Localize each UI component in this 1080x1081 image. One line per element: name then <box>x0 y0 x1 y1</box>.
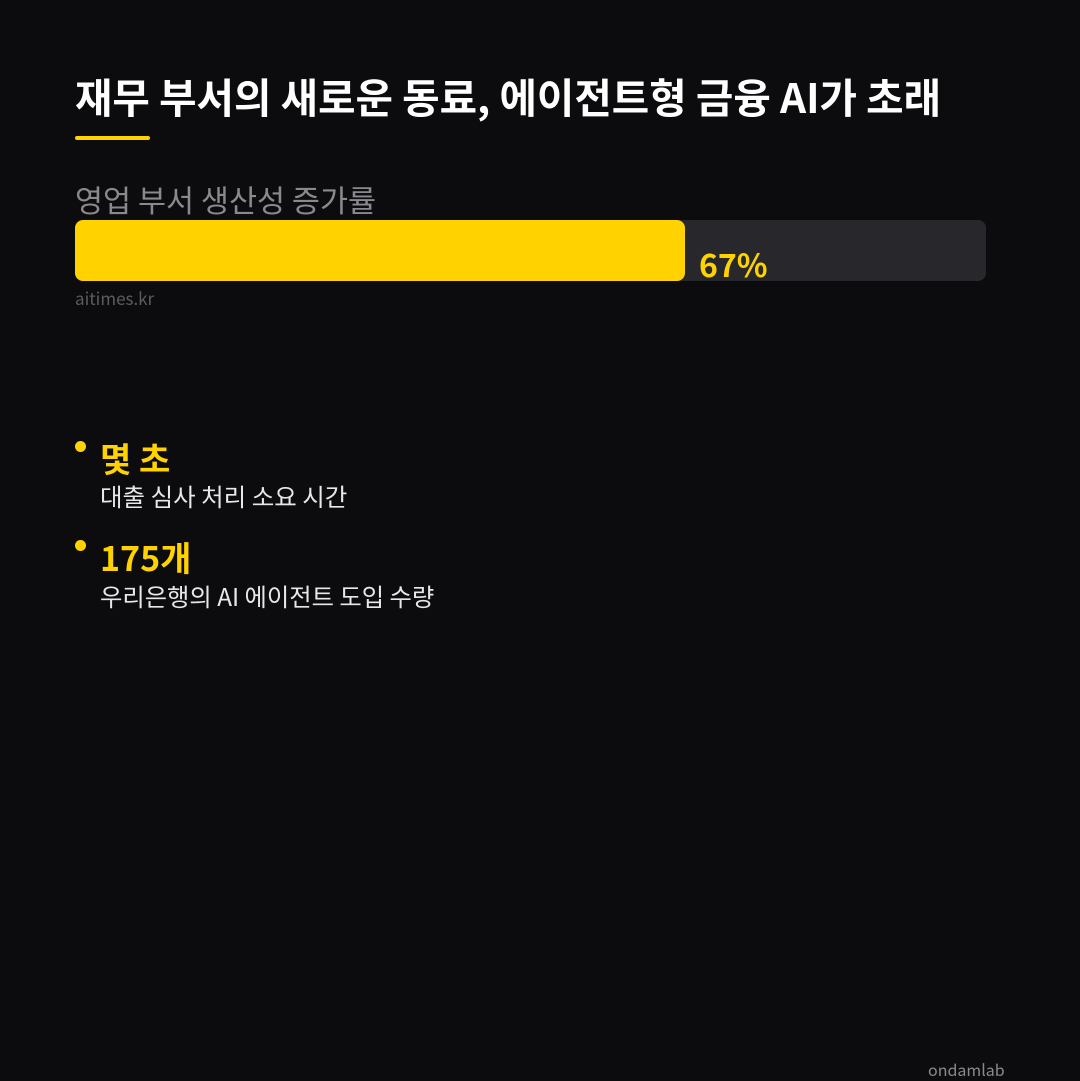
bullet <box>75 540 86 551</box>
bar label: 영업 부서 생산성 증가률 <box>75 177 376 221</box>
footer brand: ondamlab <box>928 1057 1005 1081</box>
stat value: 175개 <box>100 532 191 581</box>
bullet <box>75 441 86 452</box>
source: aitimes.kr <box>75 285 154 310</box>
bar chart <box>75 220 986 281</box>
title: 재무 부서의 새로운 동료, 에이전트형 금융 AI가 초래 <box>75 66 941 125</box>
bar value: 67% <box>699 241 768 287</box>
stat 1 <box>75 433 347 514</box>
bar fill <box>75 220 685 281</box>
title underline <box>75 136 150 140</box>
stat caption: 우리은행의 AI 에이전트 도입 수량 <box>100 578 434 613</box>
stat value: 몇 초 <box>100 433 170 482</box>
stat caption: 대출 심사 처리 소요 시간 <box>100 479 347 514</box>
stat 2 <box>75 532 434 613</box>
